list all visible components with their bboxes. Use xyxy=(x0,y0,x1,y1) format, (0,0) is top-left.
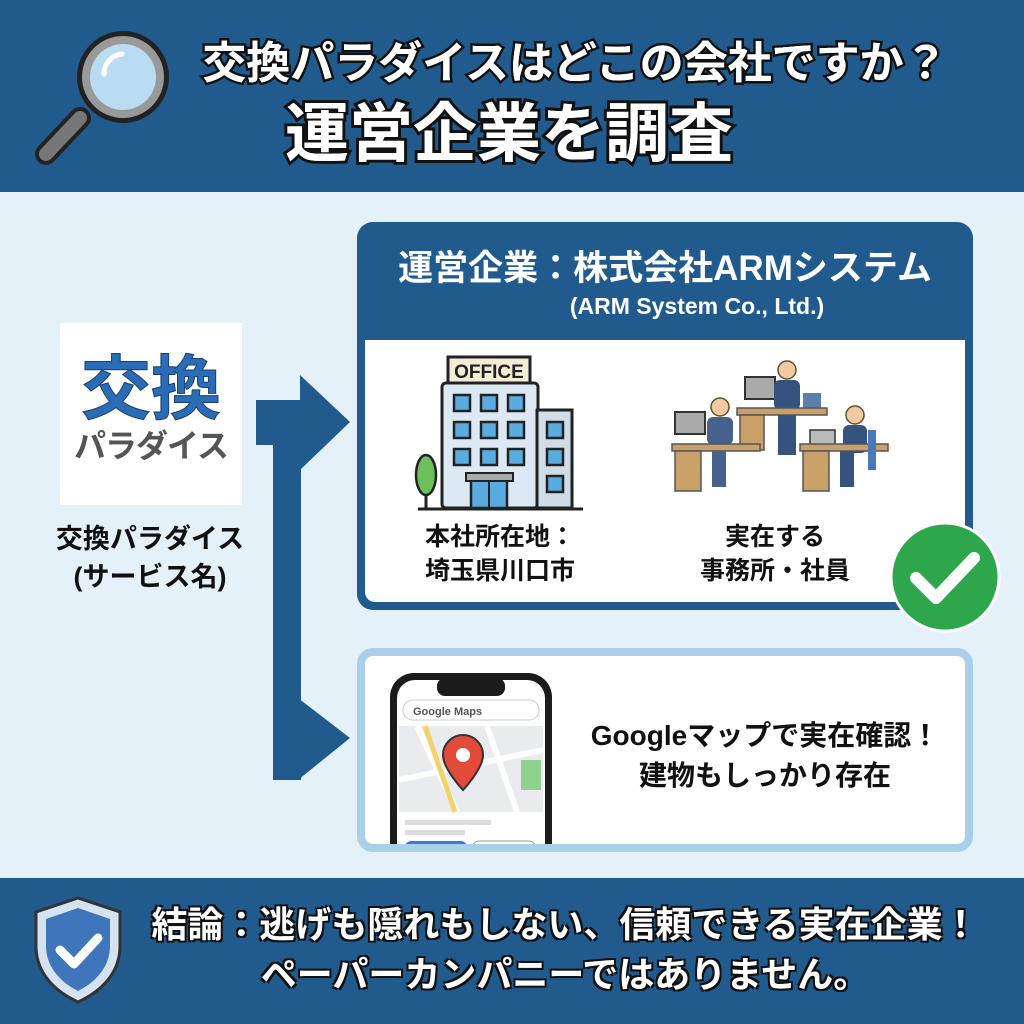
inner white area xyxy=(365,340,965,602)
service name label: 交換パラダイス xyxy=(56,524,244,554)
logo box xyxy=(60,323,242,505)
arrows xyxy=(256,375,350,780)
service name label: (サービス名) xyxy=(74,562,226,592)
icon: magnifier xyxy=(35,31,169,165)
text: 運営企業を調査 xyxy=(285,98,733,170)
panel: google maps xyxy=(357,648,973,852)
logo box: パラダイス xyxy=(74,428,228,464)
panel: operating company xyxy=(357,222,973,610)
icon: office building: OFFICE xyxy=(454,362,524,383)
company heading: 運営企業：株式会社ARMシステム xyxy=(398,249,932,288)
title line 2: 運営企業を調査 xyxy=(285,98,733,170)
text: real office: 実在する xyxy=(725,523,825,551)
conclusion text: 結論：逃げも隠れもしない、信頼できる実在企業！ xyxy=(151,904,979,945)
text: headquarters: 埼玉県川口市 xyxy=(425,557,575,585)
text: google maps confirmation: 建物もしっかり存在 xyxy=(639,760,891,791)
text: real office: 事務所・社員 xyxy=(700,557,850,585)
logo box: 交換 xyxy=(81,350,221,428)
conclusion text xyxy=(150,904,979,995)
text: real office xyxy=(700,523,850,585)
text: google maps confirmation xyxy=(591,720,939,791)
icon: office building xyxy=(414,356,583,510)
icon: office workers xyxy=(671,360,889,492)
footer band xyxy=(0,878,1024,1024)
title line 1: 交換パラダイスはどこの会社ですか？ xyxy=(202,39,948,88)
icon: phone with map xyxy=(390,673,552,844)
service name label xyxy=(56,524,244,592)
text: headquarters xyxy=(425,523,575,585)
text: 交換パラダイスはどこの会社ですか？ xyxy=(202,39,948,88)
icon: green check xyxy=(892,524,1000,632)
conclusion text: ペーパーカンパニーではありません。 xyxy=(261,954,869,995)
english name: (ARM System Co., Ltd.) xyxy=(570,293,824,319)
icon: phone with map: Google Maps xyxy=(413,706,482,718)
text: google maps confirmation: Googleマップで実在確認！ xyxy=(591,720,939,751)
text: headquarters: 本社所在地： xyxy=(425,523,575,551)
icon: shield xyxy=(34,896,122,1004)
header band xyxy=(0,0,1024,192)
